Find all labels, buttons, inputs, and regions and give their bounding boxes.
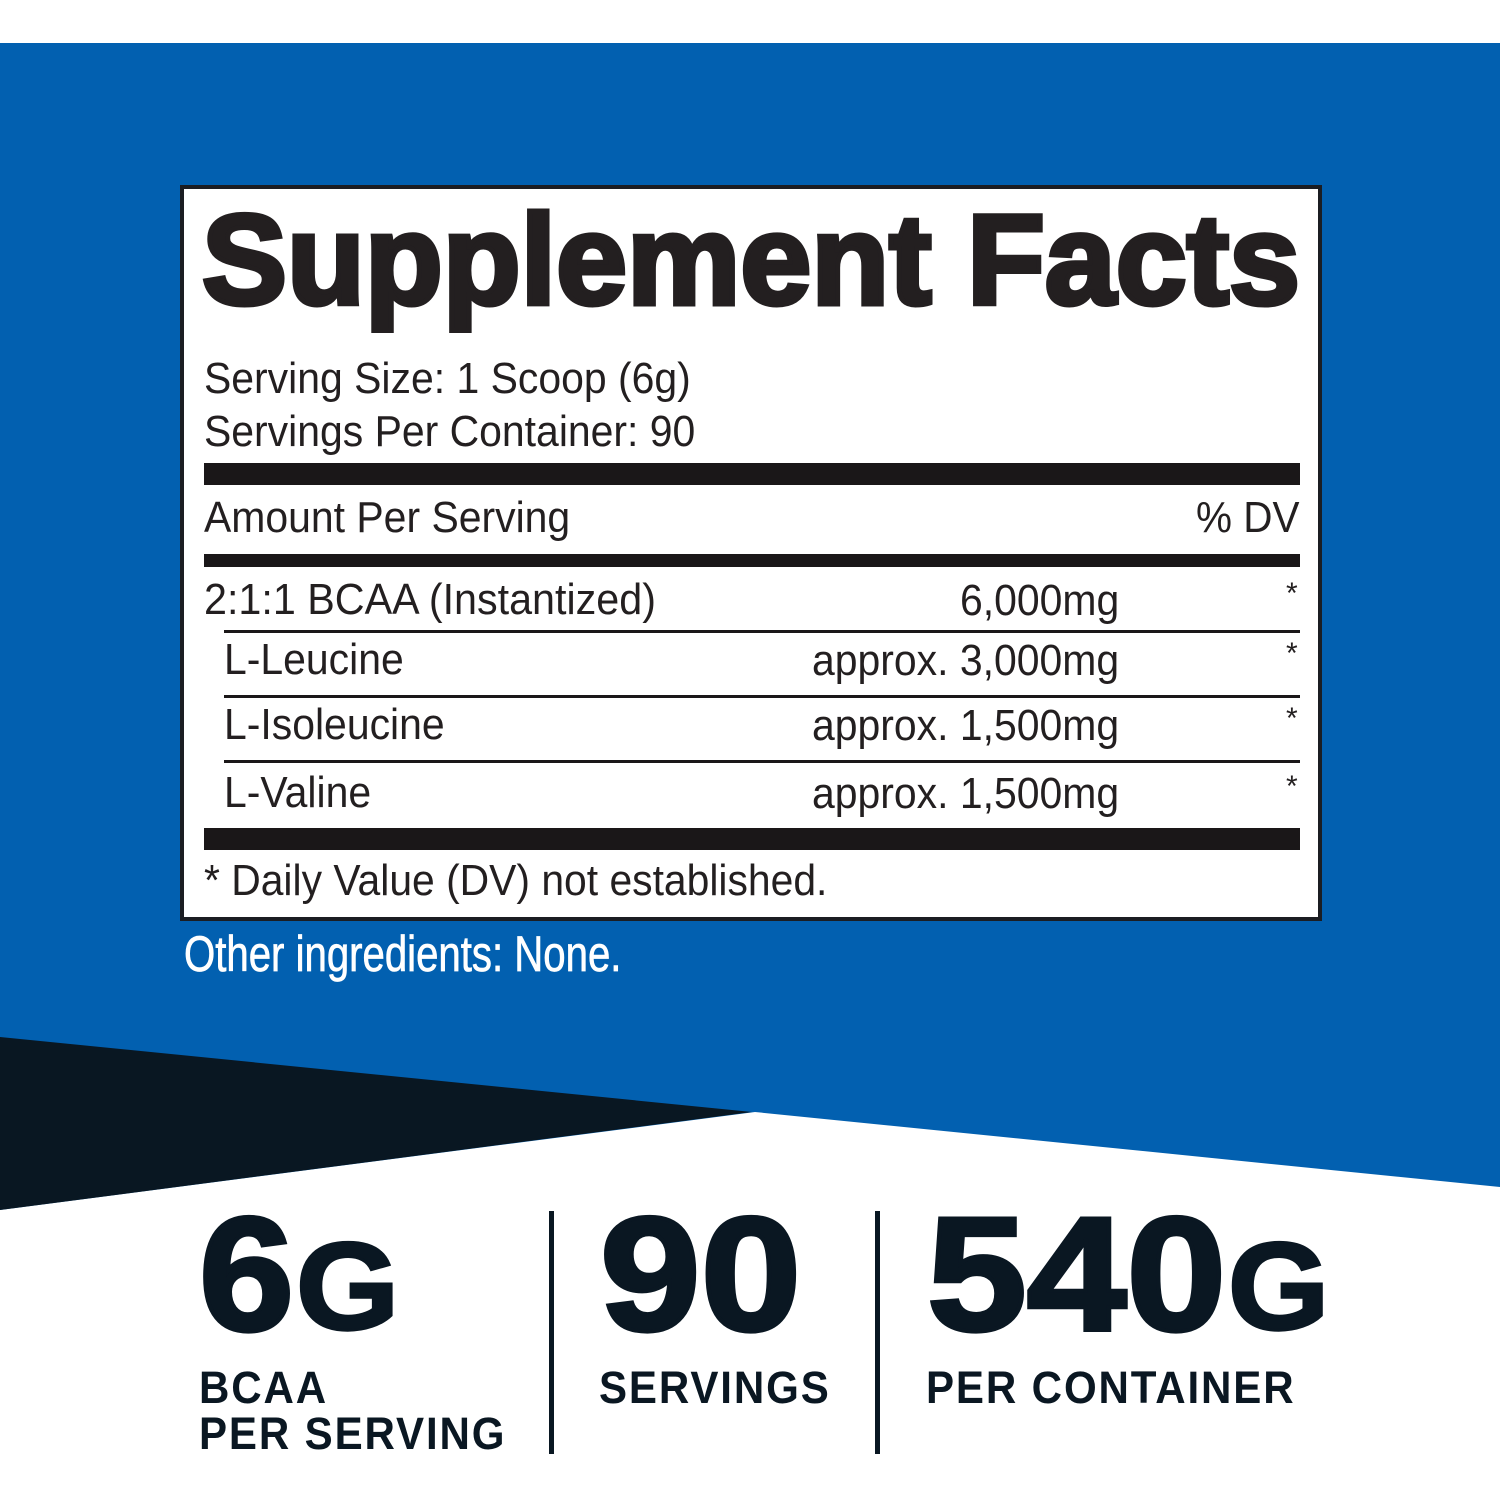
row: leucine: L-Leucine	[224, 635, 404, 684]
stat: 540g per container	[926, 1184, 1329, 1413]
isoleucine amount: approx. 1,500mg	[812, 701, 1119, 750]
label: PER CONTAINER	[926, 1362, 1296, 1413]
leucine asterisk: *	[1286, 637, 1298, 670]
thick rule	[204, 463, 1300, 485]
rule	[204, 554, 1300, 567]
heading: Supplement Facts: Supplement Facts	[202, 189, 1300, 332]
stat: 90 servings	[599, 1184, 831, 1413]
BCAA asterisk: *	[1286, 577, 1298, 610]
row: BCAA: 2:1:1 BCAA (Instantized)	[204, 575, 656, 624]
rule	[224, 695, 1300, 698]
amount per serving: Amount Per Serving	[204, 493, 570, 542]
servings per container: Servings Per Container: 90	[204, 407, 695, 456]
label: PER SERVING	[199, 1408, 506, 1459]
other ingredients: Other ingredients: None.	[184, 926, 621, 982]
label: BCAA	[199, 1362, 328, 1413]
stat: 6g BCAA per serving	[199, 1184, 506, 1459]
rule	[224, 760, 1300, 763]
row: valine: L-Valine	[224, 768, 371, 817]
row: isoleucine: L-Isoleucine	[224, 700, 445, 749]
valine amount: approx. 1,500mg	[812, 769, 1119, 818]
serving size: Serving Size: 1 Scoop (6g)	[204, 354, 691, 403]
value: 540: 540	[927, 1184, 1226, 1365]
label	[199, 1362, 506, 1459]
value: 6: 6	[199, 1184, 294, 1365]
label: SERVINGS	[599, 1362, 831, 1413]
thick rule	[204, 828, 1300, 850]
value: 90: 90	[600, 1184, 801, 1365]
BCAA amount: 6,000mg	[960, 576, 1119, 625]
unit: G: G	[296, 1218, 399, 1356]
valine asterisk: *	[1286, 770, 1298, 803]
panel: supplement facts	[180, 185, 1322, 921]
isoleucine asterisk: *	[1286, 702, 1298, 735]
unit: G: G	[1228, 1218, 1329, 1356]
rule	[224, 630, 1300, 633]
percent daily value: % DV	[1196, 493, 1299, 542]
leucine amount: approx. 3,000mg	[812, 636, 1119, 685]
footnote: * Daily Value (DV) not established.	[204, 856, 827, 905]
